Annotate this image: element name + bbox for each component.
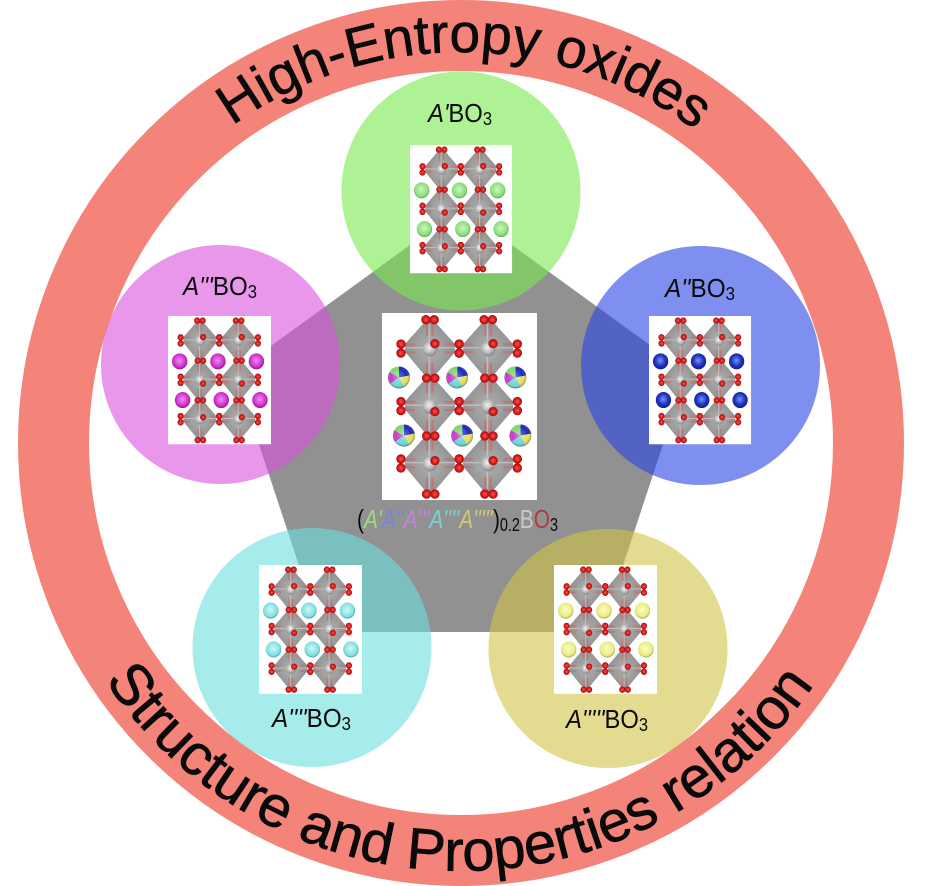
label: A'BO3: 3 (483, 109, 492, 129)
circle: A''' magenta (101, 245, 340, 484)
label: A'''BO3: A'''BO (183, 271, 250, 301)
crystal panel: A'' blue spheres (649, 316, 751, 444)
formula: (A'A''A'''A''''A''''')0.2BO3: B (520, 504, 534, 534)
crystal panel: A'''' cyan spheres (259, 565, 362, 694)
circle: A''''' yellow (488, 529, 728, 768)
crystal panel: A' green spheres (410, 145, 512, 273)
label: A''BO3: A''BO (665, 273, 728, 303)
label: A''''BO3: 3 (342, 714, 351, 734)
label: A'''BO3: 3 (248, 282, 257, 302)
circle: A' green (342, 72, 580, 310)
crystal panel: A''''' yellow spheres (554, 565, 657, 694)
label: A'''''BO3: A'''''BO (566, 704, 642, 734)
formula: (A'A''A'''A''''A''''')0.2BO3: (A'A''A'''A''''A''''') (357, 504, 502, 534)
label: A'''''BO3: 3 (639, 715, 648, 735)
label: A''BO3: 3 (726, 284, 735, 304)
circle: A'''' cyan (192, 528, 432, 767)
crystal panel: central high-entropy structure (382, 313, 537, 500)
label: A''''BO3: A''''BO (272, 703, 344, 733)
crystal panel: A''' magenta spheres (168, 316, 271, 444)
caption: Structure and Properties relation: Structure and Properties relation (110, 664, 812, 882)
label: A'BO3: A'BO (428, 98, 486, 128)
formula: (A'A''A'''A''''A''''')0.2BO3: 3 (550, 515, 558, 535)
title: High-Entropy oxides: High-Entropy oxides (214, 18, 708, 126)
circle: A'' blue (581, 246, 820, 485)
formula: (A'A''A'''A''''A''''')0.2BO3: O (534, 504, 550, 534)
outer ring (54, 36, 868, 850)
central pentagon (235, 208, 687, 632)
formula: (A'A''A'''A''''A''''')0.2BO3: 0.2 (500, 515, 520, 535)
